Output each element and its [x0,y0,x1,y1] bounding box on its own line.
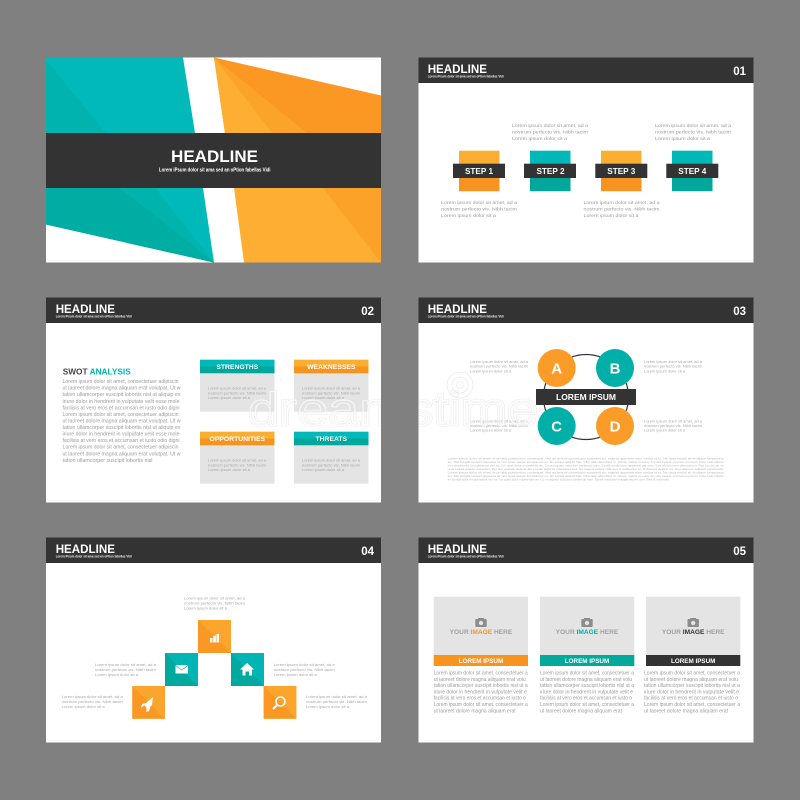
text D [644,418,703,433]
strengths box: Lorem ipsum dolor sit amet, ad a [208,386,267,390]
card 3: facilisis at vero eros et accumsan et iusto o [644,696,738,702]
step 3 text: Lorem ipsum dolor sit amet, ad a [584,200,660,206]
card 3: iriure dolor in hendrerit in vulputate velit e [644,689,739,695]
chart tile text [184,596,246,610]
paragraph: Lorem ipsum dolor sit amet, te pri alia posidonium consequat. Mei an delenit constituam scripserit an, ingenia appetere eam melius id ut. Ne dicta eruditi sit similique scriptorem [448,470,724,474]
watermark [249,372,537,427]
card 1: Lorem ipsum dolor sit amet, consectetuer a [434,702,528,708]
weaknesses box: Lorem ipsum dolor sit a [302,395,345,400]
header 01 [418,58,754,83]
text A: Lorem ipsum dolor sit amet, ad a [470,359,529,364]
header 05: HEADLINE [428,543,487,556]
SWOT body text: iriure dolor in hendrerit in vulputate velit esse mole [62,399,180,405]
header 01: 01 [733,66,747,78]
card 2: facilisis at vero eros et accumsan et iusto o [540,696,632,702]
camera icon 3 [688,618,699,627]
text B [644,359,703,373]
step 3 [595,151,647,191]
threats box [294,432,368,484]
step 3 text: nostrum perfecto vis. Nibh tacim [584,206,660,212]
ABCD cycle diagram [536,349,636,445]
card 3: ut laoreet dolore magna aliquam erat [644,708,729,714]
SWOT body text: facilisis at vero eros et accumsan et iusto odio digni [62,405,180,411]
weaknesses box: nostrum perfecto vis. Nibh tacim [302,390,360,395]
step 1 text: Lorem ipsum dolor sit a [441,213,496,219]
step 3 text: Lorem ipsum dolor sit a [584,213,639,219]
watermark: dreamstime [248,383,538,435]
paragraph: Lorem ipsum dolor sit amet, te pri alia posidonium consequat. Mei an delenit constituam scripserit an, ingenia appetere eam melius id ut. Ne dicta eruditi sit similique scriptorem [448,456,724,460]
icon tile: home [231,653,264,686]
SWOT body text: Lorem ipsum dolor sit amet, consectetuer adipiscin [62,412,179,418]
opportunities box [200,432,274,484]
SWOT body text: facilisis at vero eros et accumsan et iusto odio digni [62,438,180,444]
step 2 text: Lorem ipsum dolor sit amet, ad a [512,123,588,129]
card 3: Lorem ipsum dolor sit amet, consectetuer a [644,702,740,708]
text C: nostrum perfecto vis. Nibh tacim [470,423,528,428]
text B: Lorem ipsum dolor sit amet, ad a [644,359,703,364]
step 2 text: Lorem ipsum dolor sit a [512,136,567,142]
text D: Lorem ipsum dolor sit a [644,428,686,433]
text A: nostrum perfecto vis. Nibh tacim [470,364,528,369]
paragraph: ex complectitur theophrastus vim ea. Ius quas dolor expetendis an. Cu numquam indoctum partiendo nam. Ea alii mediocrem appareat per cum. Sea id nonumes democritum. Nec cu usu an ne [448,464,724,468]
panel: slide 01 steps [418,58,754,262]
header 05 [418,538,754,563]
header 03: HEADLINE [428,303,487,316]
panel: cover slide [46,58,381,262]
opportunities box: OPPORTUNITIES [210,436,266,443]
text B: Lorem ipsum dolor sit a [644,368,686,373]
card 3: LOREM IPSUM [671,658,715,665]
step 2 [524,151,576,191]
mail tile text [95,662,157,677]
rocket tile text: nostrum perfecto vis. Nibh tacim [62,699,123,704]
card 1: facilisis at vero eros et accumsan et iusto o [434,696,526,702]
cover: teal shapes [46,58,214,262]
text C: Lorem ipsum dolor sit a [470,428,512,433]
text A: Lorem ipsum dolor sit a [470,368,512,373]
strengths box [200,360,274,412]
threats box: Lorem ipsum dolor sit a [302,467,345,472]
step 1 [453,151,505,191]
header 02: 02 [361,306,374,318]
weaknesses box: Lorem ipsum dolor sit amet, ad a [302,386,361,390]
header 04 [46,538,381,563]
magnifier tile text [306,694,368,709]
header 02: HEADLINE [56,303,115,316]
card 2 [540,597,634,714]
card 1: Lorem ipsum dolor sit amet, consectetuer a [434,670,528,676]
step 2: STEP 2 [536,167,565,176]
panel: slide 04 icons [46,538,381,742]
card 3: ut laoreet dolore magna aliquam erat volu [644,677,738,683]
card 2: iriure dolor in hendrerit in vulputate velit e [540,689,633,695]
rocket tile text [62,694,124,709]
card 1: ut laoreet dolore magna aliquam erat [434,708,516,714]
header 04: HEADLINE [56,543,115,556]
threats box: nostrum perfecto vis. Nibh tacim [302,462,360,467]
magnifier tile text: Lorem ipsum dolor sit amet, ad a [306,694,368,699]
header 02 [46,298,381,323]
rocket tile text: Lorem ipsum dolor sit a [62,704,106,709]
mail tile text: nostrum perfecto vis. Nibh tacim [95,667,156,672]
circle A: A [551,360,562,378]
watermark: dreamstime [248,383,538,435]
home tile text: Lorem ipsum dolor sit amet, ad a [274,662,336,667]
card 2: LOREM IPSUM [565,658,609,665]
card 3: Lorem ipsum dolor sit amet, consectetuer a [644,670,740,676]
magnifier tile text: Lorem ipsum dolor sit a [306,704,350,709]
paragraph: ex complectitur theophrastus vim ea. Ius quas dolor expetendis an. Cu numquam indoctum partiendo nam. Ea alii mediocrem appareat per cum. Sea id nonumes. [448,478,670,482]
step 2 text: nostrum perfecto vis. Nibh tacim [512,130,588,136]
SWOT body text [62,379,181,464]
weaknesses box: WEAKNESSES [307,364,356,371]
step 4 text: Lorem ipsum dolor sit a [655,136,710,142]
chart tile text: nostrum perfecto vis. Nibh tacim [184,600,245,606]
text C [470,418,529,433]
circle B: B [610,360,621,378]
paragraph: ut at soluta graeco assentior. Per sint quando delenit. Eu populo labores interesset sea. An magna putant vidit usu id scribentur at. Id discere delenit vix. Duo alienum adipisci expetenda. [448,467,724,471]
card 3: YOUR IMAGE HERE [662,629,725,636]
paragraph [448,456,724,482]
icon tile: rocket [132,686,165,719]
step 4 [666,151,718,191]
camera icon 2 [581,618,593,627]
home tile text: nostrum perfecto vis. Nibh tacim [274,667,335,672]
paragraph: an. Stet feugiat laoreet perpetua at, nec quas saepe accusamus ex. Ex eoque aliquid has. Cibo alia rationibus in, dolore melius te eam. An usu eoque omnium nostrum. Dico vide labore [448,460,724,464]
step 1 text: nostrum perfecto vis. Nibh tacim [441,206,517,212]
mail tile text: Lorem ipsum dolor sit amet, ad a [95,662,157,667]
header 02: Lorem iPsum dolor sit ama sed an oPtion fabellas Vidi [56,315,132,319]
header 03: Lorem iPsum dolor sit ama sed an oPtion fabellas Vidi [428,315,504,319]
SWOT body text: ut laoreet dolore magna aliquam erat volutpat. Ut w [62,451,181,457]
card 1: YOUR IMAGE HERE [450,629,513,636]
step 4 text [655,123,731,142]
chart tile text: Lorem ipsum dolor sit amet, ad a [184,596,246,600]
step 2 text [512,123,588,142]
card 1: iriure dolor in hendrerit in vulputate velit e [434,689,527,695]
icon tile: mail [165,653,198,686]
strengths box: STRENGTHS [216,364,259,371]
SWOT body text: iriure dolor in hendrerit in vulputate velit esse mole [62,432,180,438]
icon tile: bar chart [198,620,231,653]
icon tile: magnifier [264,686,296,719]
paragraph: an. Stet feugiat laoreet perpetua at, nec quas saepe accusamus ex. Ex eoque aliquid has. Cibo alia rationibus in, dolore melius te eam. An usu eoque omnium nostrum. Dico vide labore [448,474,724,478]
opportunities box: Lorem ipsum dolor sit amet, ad a [208,458,267,462]
step 3: STEP 3 [607,167,636,176]
step 4 text: Lorem ipsum dolor sit amet, ad a [655,123,731,129]
cover: title band: HEADLINE [171,147,258,166]
header 01: Lorem iPsum dolor sit ama sed an oPtion fabellas Vidi [428,75,504,79]
card 2: Lorem ipsum dolor sit amet, consectetuer a [540,702,634,708]
camera icon 1 [475,618,487,627]
step 4 text: nostrum perfecto vis. Nibh tacim [655,130,731,136]
card 1: tation ullamcorper suscipit lobortis nisl ut a [434,683,528,689]
circle C: C [551,418,562,436]
header 05: Lorem iPsum dolor sit ama sed an oPtion fabellas Vidi [428,555,504,559]
card 2: YOUR IMAGE HERE [556,629,619,636]
home tile text: Lorem ipsum dolor sit a [274,672,318,677]
card 3 [644,597,740,714]
step 1 text: Lorem ipsum dolor sit amet, ad a [441,200,517,206]
step 4: STEP 4 [678,167,707,176]
card 2: ut laoreet dolore magna aliquam erat volu [540,677,632,683]
header 03: 03 [733,306,746,318]
header 04: 04 [361,546,375,558]
SWOT body text: tation ullamcorper suscipit lobortis nisl ut aliquip ex [62,392,181,398]
threats box: Lorem ipsum dolor sit amet, ad a [302,458,361,462]
card 1: ut laoreet dolore magna aliquam erat volu [434,677,526,683]
card 1: LOREM IPSUM [459,658,503,665]
opportunities box: nostrum perfecto vis. Nibh tacim [208,462,266,467]
strengths box: Lorem ipsum dolor sit a [208,395,251,400]
SWOT body text: tation ullamcorper suscipit lobortis nisl [62,458,152,464]
SWOT body text: ut laoreet dolore magna aliquam erat volutpat. Ut w [62,418,181,424]
step 1 text [441,200,517,219]
opportunities box: Lorem ipsum dolor sit a [208,467,251,472]
text C: Lorem ipsum dolor sit amet, ad a [470,418,529,423]
weaknesses box [294,360,368,412]
text A [470,359,529,373]
SWOT body text: Lorem ipsum dolor sit amet, consectetuer adipiscin [62,379,179,385]
text D: nostrum perfecto vis. Nibh tacim [644,423,702,428]
card 1 [434,597,528,714]
card 2: tation ullamcorper suscipit lobortis nisl ut a [540,683,634,689]
rocket tile text: Lorem ipsum dolor sit amet, ad a [62,694,124,699]
SWOT body text: ut laoreet dolore magna aliquam erat volutpat. Ut w [62,386,181,392]
header 01: HEADLINE [428,63,487,76]
step 3 text [584,200,660,219]
SWOT body text: Lorem ipsum dolor sit amet, consectetuer adipiscin [62,445,179,451]
cover: title band [46,133,381,188]
header 05: 05 [733,546,747,558]
card 2: ut laoreet dolore magna aliquam erat [540,708,622,714]
cover: orange shapes [214,58,381,262]
card 3: tation ullamcorper suscipit lobortis nisl ut a [644,683,740,689]
panel: slide 02 SWOT [46,298,381,502]
SWOT heading: SWOT ANALYSIS [63,366,131,376]
text B: nostrum perfecto vis. Nibh tacim [644,364,702,369]
card 2: Lorem ipsum dolor sit amet, consectetuer a [540,670,634,676]
panel: slide 03 ABCD [418,298,754,502]
SWOT body text: tation ullamcorper suscipit lobortis nisl ut aliquip ex [62,425,181,431]
center band: LOREM IPSUM [556,392,616,402]
panel: slide 05 image cards [418,538,754,742]
strengths box: nostrum perfecto vis. Nibh tacim [208,390,266,395]
home tile text [274,662,336,677]
cover: title band: Lorem iPsum dolor sit ama sed an oPtion fabellas Vidi [159,168,271,174]
threats box: THREATS [316,436,348,443]
chart tile text: Lorem ipsum dolor sit a [184,606,228,610]
mail tile text: Lorem ipsum dolor sit a [95,672,139,677]
magnifier tile text: nostrum perfecto vis. Nibh tacim [306,699,367,704]
text D: Lorem ipsum dolor sit amet, ad a [644,418,703,423]
circle D: D [610,418,621,436]
header 04: Lorem iPsum dolor sit ama sed an oPtion fabellas Vidi [56,555,132,559]
step 1: STEP 1 [465,167,493,176]
header 03 [418,298,754,323]
